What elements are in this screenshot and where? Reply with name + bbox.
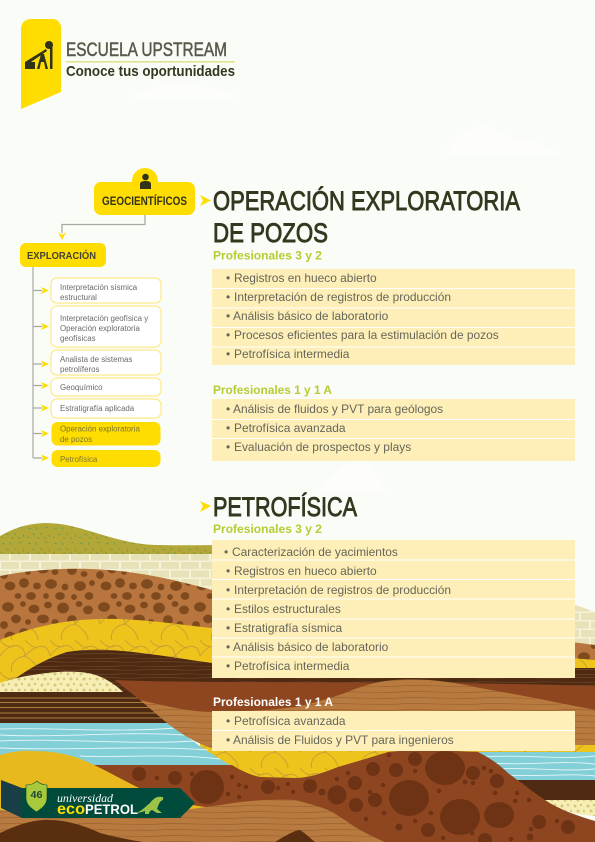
arrow: geocientíficos connector xyxy=(58,215,145,240)
list panel: operación 1 y 1 A: Evaluación de prospectos y plays xyxy=(234,440,411,454)
tree item: interpretación sísmica: estructural xyxy=(60,293,97,302)
layer: dark upper band xyxy=(0,650,595,700)
tree item: interpretación geofísica: Operación exploratoria xyxy=(60,324,140,333)
list panel: petrofísica 1 y 1 A: Análisis de Fluidos y PVT para ingenieros xyxy=(233,733,454,747)
icon: person xyxy=(140,174,151,189)
list panel: operación 1 y 1 A: • xyxy=(226,402,230,416)
list panel: operación 3 y 2: Análisis básico de laboratorio xyxy=(233,309,389,323)
arrow: section two xyxy=(200,501,211,512)
tree connector arrows xyxy=(33,267,49,462)
layer: sand hill xyxy=(0,672,123,692)
heading: operación exploratoria de pozos: OPERACIÓN EXPLORATORIA xyxy=(213,185,520,216)
list panel: petrofísica 3 y 2: • xyxy=(226,583,230,597)
list panel: operación 3 y 2: Interpretación de registros de producción xyxy=(234,290,451,304)
subheading: profesionales 1 y 1 A: Profesionales 1 y 1 A xyxy=(213,383,332,397)
list panel: operación 3 y 2: • xyxy=(226,328,230,342)
list panel: petrofísica 3 y 2: • xyxy=(226,659,230,673)
list panel: petrofísica 3 y 2: Análisis básico de laboratorio xyxy=(233,640,389,654)
tree item: interpretación sísmica: Interpretación sísmica xyxy=(60,283,138,292)
layer: sand right xyxy=(543,800,595,816)
list panel: operación 3 y 2: Registros en hueco abierto xyxy=(234,271,377,285)
list panel: operación 1 y 1 A: Análisis de fluidos y PVT para geólogos xyxy=(233,402,443,416)
tree item: operación exploratoria de pozos: Operación exploratoria xyxy=(60,424,140,434)
list panel: operación 1 y 1 A: Petrofísica avanzada xyxy=(234,421,346,435)
clouds xyxy=(130,84,560,492)
layer: water left xyxy=(0,723,232,770)
arrow: section one xyxy=(200,195,211,206)
layer: tan strata bottom xyxy=(0,800,385,842)
badge: 46 shield: 46 xyxy=(30,790,43,801)
list panel: operación 3 y 2: • xyxy=(226,347,230,361)
tree item: analista de sistemas: Analista de sistemas xyxy=(60,355,132,364)
list panel: petrofísica 1 y 1 A: Petrofísica avanzada xyxy=(234,714,346,728)
list panel: petrofísica 3 y 2: Caracterización de yacimientos xyxy=(232,545,398,559)
list panel: petrofísica 3 y 2 xyxy=(212,540,575,678)
list panel: petrofísica 3 y 2: • xyxy=(226,564,230,578)
node: exploración: EXPLORACIÓN xyxy=(27,249,96,262)
tree item: analista de sistemas: petrolíferos xyxy=(60,365,100,374)
tree item: interpretación geofísica: Interpretación geofísica y xyxy=(60,314,148,323)
list panel: petrofísica 1 y 1 A: • xyxy=(226,714,230,728)
list panel: petrofísica 3 y 2: Petrofísica intermedia xyxy=(234,659,350,673)
geological strata illustration xyxy=(0,523,595,842)
tree item: interpretación geofísica xyxy=(51,306,161,347)
list panel: operación 1 y 1 A xyxy=(212,399,575,461)
list panel: operación 3 y 2: • xyxy=(226,271,230,285)
list panel: operación 3 y 2: • xyxy=(226,290,230,304)
tree item: interpretación geofísica: geofísicas xyxy=(60,334,96,343)
list panel: operación 1 y 1 A: • xyxy=(226,440,230,454)
header logo tab xyxy=(21,19,61,109)
footer banner: universidad ecopetrol xyxy=(1,780,195,818)
list panel: petrofísica 3 y 2: • xyxy=(226,640,230,654)
layer: brick xyxy=(0,554,595,660)
header title xyxy=(66,40,235,80)
list panel: petrofísica 1 y 1 A: • xyxy=(226,733,230,747)
tree item: geoquímico: Geoquímico xyxy=(60,383,103,392)
icon: oil pumpjack xyxy=(25,41,53,69)
subtitle: Conoce tus oportunidades xyxy=(66,63,235,80)
logo text: universidad xyxy=(57,791,114,805)
list panel: petrofísica 1 y 1 A xyxy=(212,711,575,751)
tree item: analista de sistemas xyxy=(51,350,161,375)
tree item: geoquímico xyxy=(51,378,161,396)
list panel: operación 3 y 2: Petrofísica intermedia xyxy=(234,347,350,361)
list panel: operación 3 y 2: Procesos eficientes para la estimulación de pozos xyxy=(234,328,499,342)
layer: water right xyxy=(470,752,595,780)
list panel: operación 1 y 1 A: • xyxy=(226,421,230,435)
list panel: petrofísica 3 y 2: • xyxy=(224,545,228,559)
tree item: estratigrafía xyxy=(51,399,161,418)
badge: 46 shield xyxy=(26,781,47,812)
tree item: interpretación sísmica xyxy=(51,278,161,303)
tree item: estratigrafía: Estratigrafía aplicada xyxy=(60,404,135,413)
layer: dark bottom left xyxy=(0,820,143,842)
subheading: petrofísica 3 y 2: Profesionales 3 y 2 xyxy=(213,522,322,536)
category node: geocientíficos xyxy=(94,168,195,215)
layer: yellow cells lower xyxy=(200,740,595,785)
subheading: petrofísica 1 y 1 A: Profesionales 1 y 1 A xyxy=(213,695,333,709)
layer: yellow cells xyxy=(0,619,595,700)
list panel: petrofísica 3 y 2: • xyxy=(226,621,230,635)
logo text: PETROL xyxy=(85,801,138,817)
list panel: petrofísica 3 y 2: Estilos estructurales xyxy=(234,602,341,616)
list panel: petrofísica 3 y 2: Estratigrafía sísmica xyxy=(234,621,342,635)
rust rocks xyxy=(132,751,575,842)
layer: dark stripes xyxy=(0,692,200,723)
layer: rust band xyxy=(115,680,595,723)
subheading: profesionales 3 y 2: Profesionales 3 y 2 xyxy=(213,248,322,262)
layer: rust ground xyxy=(0,750,595,842)
layer: brown rocks xyxy=(0,569,595,700)
layer: olive topsoil xyxy=(0,523,260,560)
list panel: petrofísica 3 y 2: • xyxy=(226,602,230,616)
heading: operación exploratoria de pozos xyxy=(213,185,520,248)
list panel: operación 3 y 2: • xyxy=(226,309,230,323)
layer: yellow hill xyxy=(0,751,215,825)
layer: dark bottom mid xyxy=(275,830,315,842)
list panel: petrofísica 3 y 2: Interpretación de registros de producción xyxy=(234,583,451,597)
tree item: petrofísica xyxy=(52,450,160,467)
tree item: operación exploratoria de pozos xyxy=(52,422,160,446)
heading: petrofísica: PETROFÍSICA xyxy=(213,492,357,522)
logo text: eco xyxy=(57,801,85,818)
layer: yellow strip xyxy=(218,745,595,778)
layer: dark right band xyxy=(500,780,595,802)
icon: iguana xyxy=(136,797,163,814)
logo text xyxy=(57,791,138,818)
list panel: petrofísica 3 y 2: Registros en hueco abierto xyxy=(234,564,377,578)
tree item: operación exploratoria de pozos: de pozos xyxy=(60,435,92,444)
node: exploración xyxy=(20,243,106,267)
tree item: petrofísica: Petrofísica xyxy=(60,455,98,464)
layer: tan strata middle xyxy=(140,679,595,752)
heading: operación exploratoria de pozos: DE POZOS xyxy=(213,218,328,248)
category node: geocientíficos: GEOCIENTÍFICOS xyxy=(102,193,187,208)
header title: ESCUELA UPSTREAM xyxy=(66,40,227,61)
list panel: operación 3 y 2 xyxy=(212,269,575,365)
